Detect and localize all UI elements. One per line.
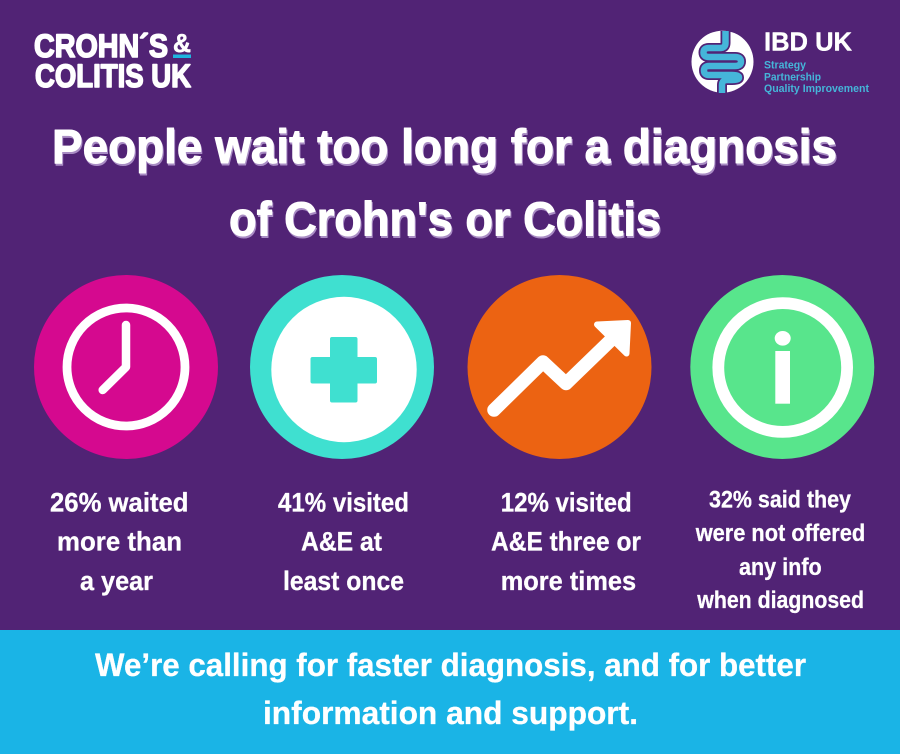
logo strapline bbox=[764, 60, 869, 95]
title: People wait too long for a diagnosis bbox=[52, 121, 837, 174]
stat: 41% visited: least once bbox=[283, 566, 404, 596]
stat: 26% waited: a year bbox=[80, 566, 153, 596]
stat: 41% visited: A&E at bbox=[301, 527, 382, 557]
icon: rising arrow chart bbox=[468, 275, 652, 459]
logo strapline: Partnership bbox=[764, 72, 821, 84]
icon: information bbox=[690, 275, 874, 459]
stat: 26% waited: 26% waited bbox=[50, 488, 188, 518]
icon: clock bbox=[34, 275, 218, 459]
stat: 32% not offered info: any info bbox=[739, 554, 822, 581]
logo: Crohn's & Colitis UK bbox=[34, 28, 191, 94]
icon: medical cross bbox=[250, 275, 434, 459]
call to action text: information and support. bbox=[263, 695, 638, 731]
stat: 32% not offered info: 32% said they bbox=[709, 486, 852, 514]
stat: 32% not offered info bbox=[695, 486, 865, 614]
stat: 26% waited: more than bbox=[57, 527, 182, 557]
icon: intestine bbox=[692, 31, 754, 93]
stat: 41% visited bbox=[278, 488, 409, 596]
logo: Crohn's & Colitis UK: CROHN´S bbox=[34, 28, 168, 64]
stat: 12% visited: A&E three or bbox=[491, 527, 641, 557]
logo: IBD UK bbox=[692, 26, 869, 95]
logo: Crohn's & Colitis UK: & bbox=[173, 28, 191, 58]
stat: 12% visited: more times bbox=[501, 566, 636, 596]
call to action text bbox=[95, 647, 806, 731]
stat: 12% visited bbox=[491, 488, 641, 596]
call to action banner bbox=[0, 630, 900, 754]
logo strapline: Quality Improvement bbox=[764, 83, 869, 95]
stat: 41% visited: 41% visited bbox=[278, 488, 409, 518]
logo wordmark: IBD UK bbox=[764, 26, 852, 56]
stat: 26% waited bbox=[50, 488, 188, 596]
logo strapline: Strategy bbox=[764, 60, 807, 72]
logo: Crohn's & Colitis UK: COLITIS UK bbox=[35, 58, 191, 94]
stat: 32% not offered info: were not offered bbox=[695, 520, 865, 547]
stat: 32% not offered info: when diagnosed bbox=[696, 587, 864, 614]
stat: 12% visited: 12% visited bbox=[501, 488, 632, 518]
title bbox=[52, 121, 837, 246]
call to action text: We’re calling for faster diagnosis, and for better bbox=[95, 647, 806, 683]
title: of Crohn's or Colitis bbox=[229, 194, 661, 246]
